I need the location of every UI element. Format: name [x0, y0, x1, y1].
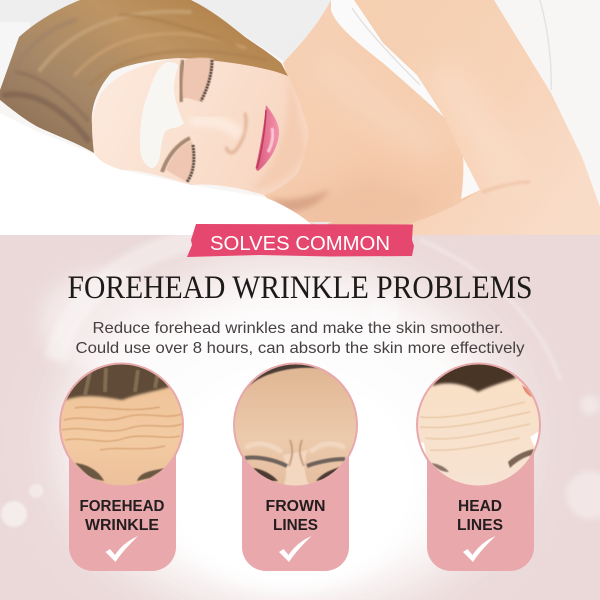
photo: woman sleeping wearing forehead patch — [0, 0, 600, 235]
white top strap — [331, 0, 444, 117]
pillow — [0, 113, 318, 235]
arm — [408, 0, 600, 235]
description text — [76, 320, 524, 357]
card: head lines — [416, 358, 541, 571]
card: frown lines — [233, 360, 358, 571]
banner: solves common — [187, 224, 414, 257]
label: FROWN — [266, 498, 326, 515]
photo circle: head lines — [416, 358, 541, 488]
card pill — [242, 450, 349, 571]
icon: checkmark — [279, 536, 312, 562]
lips — [256, 105, 279, 171]
card pill — [69, 450, 176, 571]
background: soft pink bokeh panel — [0, 235, 600, 600]
label: FOREHEAD — [80, 498, 164, 515]
nose shadow — [226, 113, 246, 153]
label: WRINKLE — [85, 517, 159, 534]
label: HEAD — [458, 498, 502, 515]
bedding background — [0, 0, 600, 206]
banner text: SOLVES COMMON — [210, 232, 390, 255]
white top lower cup — [461, 157, 480, 199]
photo circle: frown — [233, 360, 358, 488]
description text: Could use over 8 hours, can absorb the skin more effectively — [76, 340, 524, 357]
face — [91, 58, 308, 195]
title: FOREHEAD WRINKLE PROBLEMS — [68, 270, 532, 306]
lower eye socket and eye — [162, 138, 194, 182]
card: forehead wrinkle — [59, 360, 184, 571]
card pill — [427, 450, 534, 571]
label — [457, 498, 503, 534]
forehead patch — [140, 62, 184, 168]
upper eye socket and eye — [180, 58, 214, 102]
icon: checkmark — [106, 536, 138, 562]
label — [80, 498, 164, 534]
icon: checkmark — [463, 536, 496, 562]
label — [266, 498, 326, 534]
label: LINES — [457, 517, 503, 534]
label: LINES — [273, 517, 318, 534]
hair — [0, 0, 288, 153]
photo circle: wrinkled forehead — [59, 360, 184, 488]
description text: Reduce forehead wrinkles and make the skin smoother. — [92, 320, 504, 337]
body and chest — [264, 0, 600, 235]
